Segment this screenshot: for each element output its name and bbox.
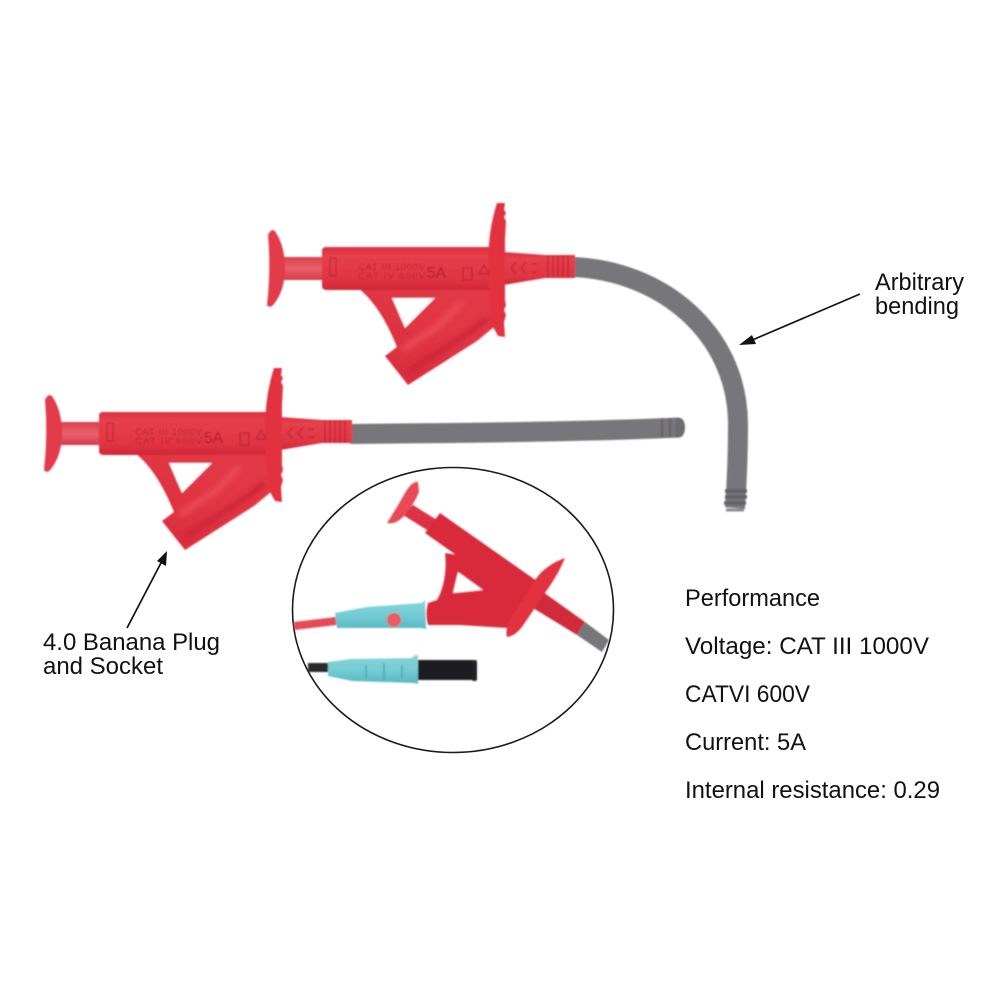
label: banana plug and socket: 4.0 Banana Plug — [43, 630, 220, 656]
text block: performance specifications: Voltage: CAT III 1000V — [685, 633, 929, 660]
label: arbitrary bending — [875, 270, 964, 320]
upper probe markings: CAT IV 600V — [358, 271, 426, 282]
arrow: arbitrary bending — [739, 294, 860, 345]
straight grey cable — [350, 418, 685, 437]
bent grey cable — [572, 267, 747, 510]
text block: performance specifications: CATVI 600V — [685, 681, 810, 708]
label: arbitrary bending: bending — [875, 294, 959, 320]
upper probe body — [267, 203, 575, 385]
black test lead — [308, 663, 330, 672]
teal banana plug with black socket — [328, 655, 477, 684]
lower probe markings: CAT III 1000V — [135, 427, 203, 438]
upper probe markings: CAT III 1000V — [358, 262, 426, 273]
upper probe markings: 5A — [427, 265, 447, 282]
text block: performance specifications — [685, 585, 940, 804]
text block: performance specifications: Current: 5A — [685, 729, 806, 756]
detail circle — [292, 468, 614, 752]
text block: performance specifications: Internal resistance: 0.29 — [685, 777, 940, 804]
grey cable stub — [577, 622, 609, 652]
arrow: banana plug — [127, 551, 167, 628]
upper probe markings — [358, 262, 447, 282]
label: banana plug and socket: and Socket — [43, 654, 163, 680]
label: banana plug and socket — [43, 630, 220, 680]
lower probe markings — [135, 427, 224, 447]
lower probe body — [44, 368, 352, 550]
upper probe with bent cable — [267, 203, 747, 510]
teal banana plug with red dot — [335, 600, 426, 629]
lower probe markings: CAT IV 600V — [135, 436, 203, 447]
angled red probe — [387, 482, 585, 637]
red test lead — [294, 621, 336, 626]
lower probe markings: 5A — [204, 430, 224, 447]
text block: performance specifications: Performance — [685, 585, 820, 612]
label: arbitrary bending: Arbitrary — [875, 270, 964, 296]
lower probe with straight cable — [44, 368, 685, 550]
